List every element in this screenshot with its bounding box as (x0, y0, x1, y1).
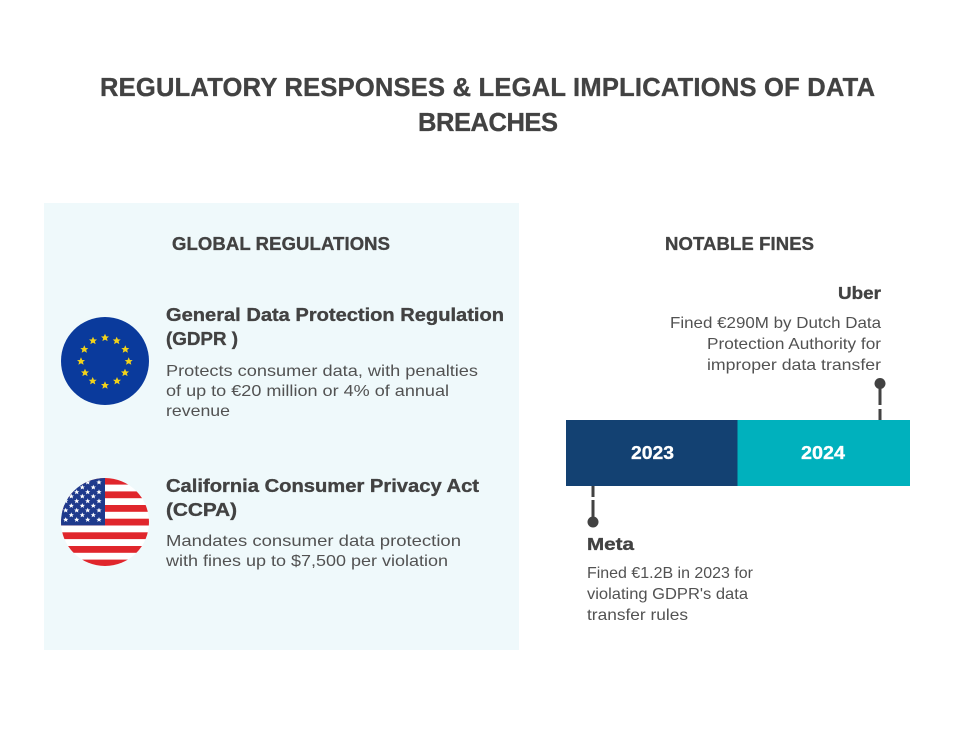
GDPR text block: General Data Protection Regulation (166, 304, 504, 325)
segment: 2023: 2023 (631, 443, 674, 463)
Meta text block (587, 534, 754, 624)
Meta text block: Meta (587, 534, 634, 554)
Uber text block (670, 283, 882, 374)
segment: 2024: 2024 (801, 443, 845, 463)
CCPA text block: Mandates consumer data protection (166, 533, 461, 550)
Meta text block: violating GDPR's data (587, 586, 748, 603)
marker: Uber pin (874, 378, 886, 420)
title: REGULATORY RESPONSES & LEGAL IMPLICATIONS OF DATA (100, 74, 875, 102)
panel: global regulations (44, 203, 519, 650)
GDPR text block: revenue (166, 403, 230, 420)
Meta text block: Fined €1.2B in 2023 for (587, 565, 754, 582)
CCPA text block (165, 475, 479, 570)
icon: US flag (61, 478, 149, 566)
segment: 2024 (738, 420, 910, 486)
timeline bar (566, 420, 910, 486)
GDPR text block: Protects consumer data, with penalties (166, 363, 478, 380)
marker: Meta pin (588, 486, 598, 528)
segment: 2023 (566, 420, 738, 486)
Uber text block: Protection Authority for (707, 336, 882, 353)
Uber text block: Fined €290M by Dutch Data (670, 315, 881, 332)
icon: EU flag (61, 317, 149, 405)
Meta text block: transfer rules (587, 607, 688, 624)
heading: notable fines: NOTABLE FINES (665, 233, 814, 254)
title: BREACHES (418, 109, 558, 137)
GDPR text block: of up to €20 million or 4% of annual (166, 383, 449, 400)
Uber text block: Uber (838, 283, 881, 303)
heading: global regulations: GLOBAL REGULATIONS (172, 233, 390, 254)
GDPR text block (166, 304, 504, 420)
title (100, 74, 875, 137)
Uber text block: improper data transfer (707, 357, 882, 374)
GDPR text block: (GDPR ) (166, 328, 238, 349)
CCPA text block: with fines up to $7,500 per violation (165, 553, 448, 570)
CCPA text block: (CCPA) (166, 499, 237, 520)
CCPA text block: California Consumer Privacy Act (166, 475, 479, 496)
